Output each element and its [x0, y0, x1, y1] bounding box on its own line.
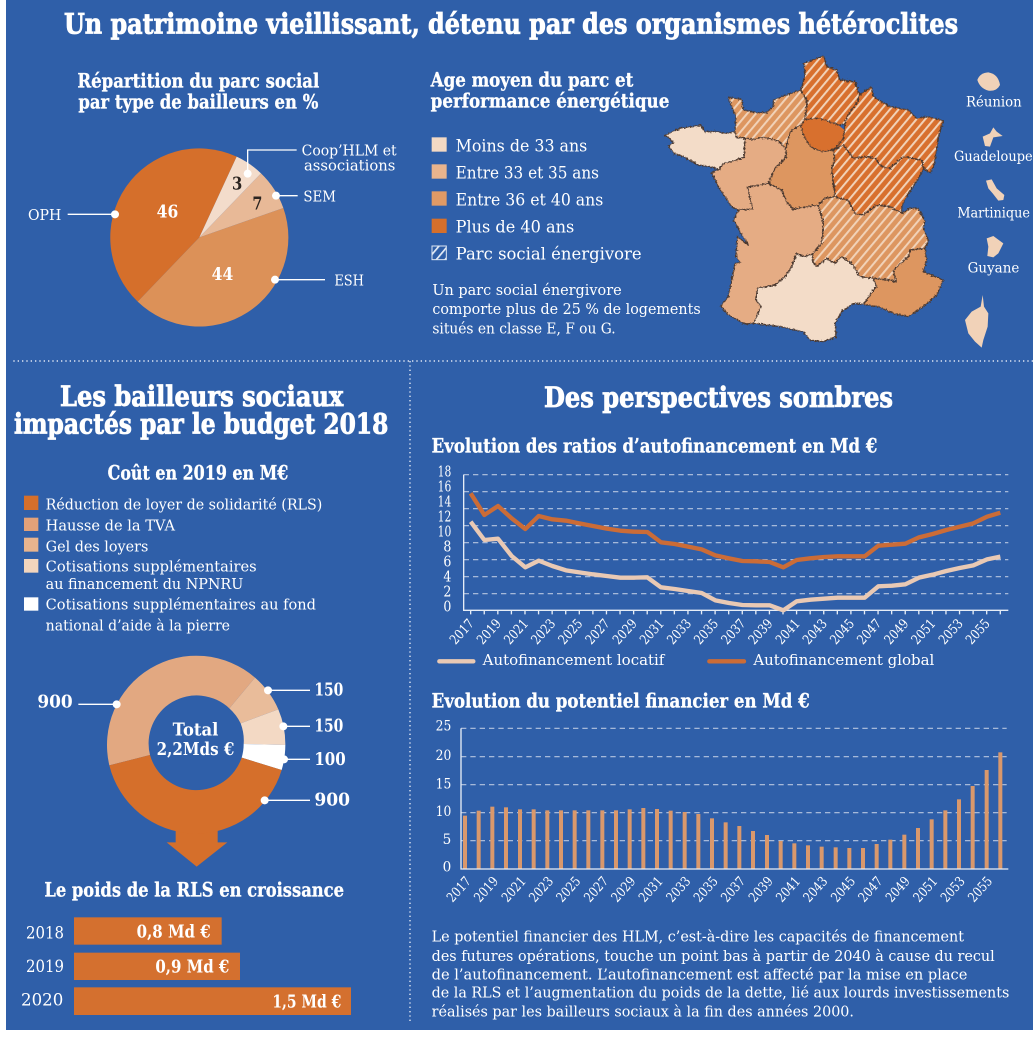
pie chart: 3 [232, 174, 242, 194]
cost legend: Cotisations supplémentaires [46, 558, 257, 576]
map note: Un parc social énergivore [432, 281, 622, 299]
map note: comporte plus de 25 % de logements [432, 300, 701, 318]
bar chart heading: Evolution du potentiel financier en Md € [432, 688, 810, 712]
y axis labels: 25 [436, 719, 451, 735]
overseas territories and Corsica: Réunion [966, 95, 1022, 111]
x axis labels: 2023 [529, 617, 559, 648]
x axis labels: 2041 [773, 617, 804, 648]
pie chart: 46 [157, 202, 178, 222]
x axis labels: 2045 [829, 874, 859, 906]
panel: age and energy performance legend [430, 68, 701, 337]
x axis labels: 2027 [583, 617, 613, 648]
bar 2018: 2018 [26, 924, 64, 943]
x axis labels: 2053 [936, 617, 967, 648]
x axis labels: 2039 [746, 617, 776, 648]
section heading: impactés par le budget 2018 [14, 407, 388, 440]
y axis labels: 5 [443, 832, 451, 848]
x axis labels: 2055 [966, 874, 996, 906]
y axis labels: 0 [443, 598, 451, 616]
y axis labels: 6 [443, 553, 451, 571]
panel: budget 2018 impact [14, 380, 388, 635]
bar 2019: 0,9 Md € [155, 958, 229, 978]
x axis labels: 2055 [963, 617, 994, 648]
x axis labels: 2031 [637, 617, 668, 648]
x axis labels: 2037 [719, 617, 749, 648]
overseas territories and Corsica: Guyane [968, 261, 1019, 277]
x axis labels: 2043 [800, 617, 831, 648]
closing text block [432, 928, 1009, 1021]
x axis labels: 2045 [828, 617, 858, 648]
bar 2018 [26, 917, 222, 945]
panel: RLS growth bars [21, 878, 351, 1015]
x axis labels: 2021 [502, 617, 532, 648]
line: autofinancement global [471, 493, 1000, 567]
line chart legend: Autofinancement global [752, 651, 935, 669]
line chart axes [464, 475, 1008, 610]
bars [463, 752, 1002, 869]
bar 2020: 2020 [21, 990, 63, 1009]
y axis labels: 16 [438, 478, 451, 496]
y axis labels [436, 719, 451, 876]
map heading [430, 68, 669, 113]
pie heading: Répartition du parc social [77, 68, 320, 92]
map note: situés en classe E, F ou G. [432, 319, 616, 337]
donut callouts: 150 [314, 681, 343, 701]
map heading: Age moyen du parc et [430, 68, 634, 92]
y axis labels: 18 [438, 463, 451, 481]
closing text block: de l’autofinancement. L’autofinancement est affecté par la mise en place [432, 966, 967, 984]
pie heading: par type de bailleurs en % [78, 89, 318, 113]
x axis labels: 2025 [556, 617, 586, 648]
line: autofinancement locatif [471, 522, 1000, 610]
x axis labels: 2019 [472, 874, 502, 906]
pie callouts: ESH [334, 271, 364, 289]
cost legend: Hausse de la TVA [46, 517, 175, 535]
bar 2018: 0,8 Md € [137, 922, 211, 942]
x axis labels: 2037 [719, 874, 749, 906]
line chart legend [439, 651, 935, 669]
bar 2020 [21, 987, 351, 1015]
x axis labels: 2035 [691, 874, 722, 906]
section heading: perspectives: Des perspectives sombres [544, 381, 893, 414]
x axis labels: 2053 [938, 874, 969, 906]
x axis labels: 2049 [882, 617, 912, 648]
donut chart [37, 656, 350, 867]
pie callouts: OPH [28, 206, 61, 224]
y axis labels: 2 [443, 583, 451, 601]
pie callouts: associations [304, 157, 395, 175]
x axis labels [444, 874, 996, 906]
section heading [14, 380, 388, 440]
y axis labels: 10 [436, 804, 451, 820]
x axis labels: 2021 [499, 874, 530, 906]
RLS heading: Le poids de la RLS en croissance [44, 878, 344, 902]
x axis labels: 2019 [474, 617, 505, 648]
bar chart axes [461, 728, 1008, 869]
y axis labels: 12 [438, 508, 451, 526]
overseas territories and Corsica [954, 72, 1033, 348]
x axis labels: 2017 [444, 874, 475, 906]
map heading: performance énergétique [431, 89, 669, 113]
x axis labels: 2047 [855, 617, 885, 648]
donut callouts: 100 [314, 750, 346, 770]
x axis labels: 2051 [909, 617, 939, 648]
map legend [432, 137, 642, 263]
cost subheading: Coût en 2019 en M€ [108, 460, 288, 484]
map note [432, 281, 701, 337]
donut callouts: 900 [314, 791, 350, 811]
y axis labels: 20 [436, 748, 451, 764]
map legend: Parc social énergivore [456, 244, 642, 263]
x axis labels: 2041 [774, 874, 804, 906]
pie callouts: SEM [303, 187, 336, 205]
map of France by region [665, 56, 1033, 348]
pie chart: 44 [212, 265, 233, 285]
map legend: Entre 36 et 40 ans [456, 191, 603, 210]
cost legend: Gel des loyers [46, 538, 148, 556]
panel: financial potential bar chart [432, 688, 1008, 906]
donut total [157, 721, 234, 760]
x axis labels: 2035 [692, 617, 722, 648]
y axis labels [438, 463, 451, 616]
y axis labels: 15 [436, 776, 451, 792]
x axis labels: 2043 [801, 874, 831, 906]
pie callouts [28, 141, 397, 289]
map legend: Plus de 40 ans [456, 218, 574, 237]
cost legend: Réduction de loyer de solidarité (RLS) [46, 495, 322, 513]
pie callouts: Coop’HLM et [302, 141, 397, 159]
x axis labels: 2033 [664, 874, 694, 906]
x axis labels: 2033 [665, 617, 695, 648]
x axis labels [447, 617, 994, 648]
map legend: Entre 33 et 35 ans [456, 164, 599, 183]
pie heading [77, 68, 320, 113]
arrow down to RLS bars [167, 823, 227, 867]
cost legend [24, 495, 322, 635]
closing text block: réalisés par les bailleurs sociaux à la fin des années 2000. [432, 1003, 854, 1021]
panel: self-financing line chart [432, 434, 1008, 669]
pie chart [110, 148, 288, 327]
section heading: Les bailleurs sociaux [60, 380, 344, 413]
donut callouts: 150 [314, 717, 343, 737]
cost legend: Cotisations supplémentaires au fond [46, 595, 316, 613]
x axis labels: 2029 [610, 617, 641, 648]
map legend: Moins de 33 ans [456, 137, 587, 156]
closing text block: de la RLS et l’augmentation du poids de la dette, lié aux lourds investissements [432, 983, 1009, 1001]
donut total: Total [173, 721, 219, 741]
x axis labels: 2031 [636, 874, 667, 906]
closing text block: Le potentiel financier des HLM, c’est-à-dire les capacités de financement [432, 928, 964, 946]
bar 2019: 2019 [26, 957, 64, 976]
x axis labels: 2025 [554, 874, 584, 906]
panel: pie chart by landlord type [28, 68, 397, 327]
donut callouts: 900 [37, 693, 73, 713]
line chart heading: Evolution des ratios d’autofinancement en Md € [432, 434, 877, 458]
x axis labels: 2039 [746, 874, 777, 906]
y axis labels: 4 [443, 568, 451, 586]
y axis labels: 10 [438, 523, 451, 541]
x axis labels: 2049 [883, 874, 914, 906]
x axis labels: 2023 [527, 874, 557, 906]
y axis labels: 14 [438, 493, 451, 511]
donut callouts [37, 681, 350, 811]
donut total: 2,2Mds € [157, 740, 234, 760]
y axis labels: 0 [443, 860, 451, 876]
line chart legend: Autofinancement locatif [482, 651, 666, 669]
x axis labels: 2017 [447, 617, 478, 648]
cost legend: au financement du NPNRU [46, 575, 243, 593]
x axis labels: 2051 [911, 874, 941, 906]
x axis labels: 2029 [609, 874, 639, 906]
x axis labels: 2047 [856, 874, 886, 906]
y axis labels: 8 [443, 538, 451, 556]
bar 2020: 1,5 Md € [272, 992, 341, 1012]
region outlines [665, 56, 943, 342]
closing text block: des futures opérations, touche un point bas à partir de 2040 à cause du recul [432, 947, 995, 965]
bar 2019 [26, 953, 240, 980]
pie chart: 7 [252, 194, 262, 214]
x axis labels: 2027 [582, 874, 612, 906]
cost legend: national d’aide à la pierre [46, 617, 230, 635]
